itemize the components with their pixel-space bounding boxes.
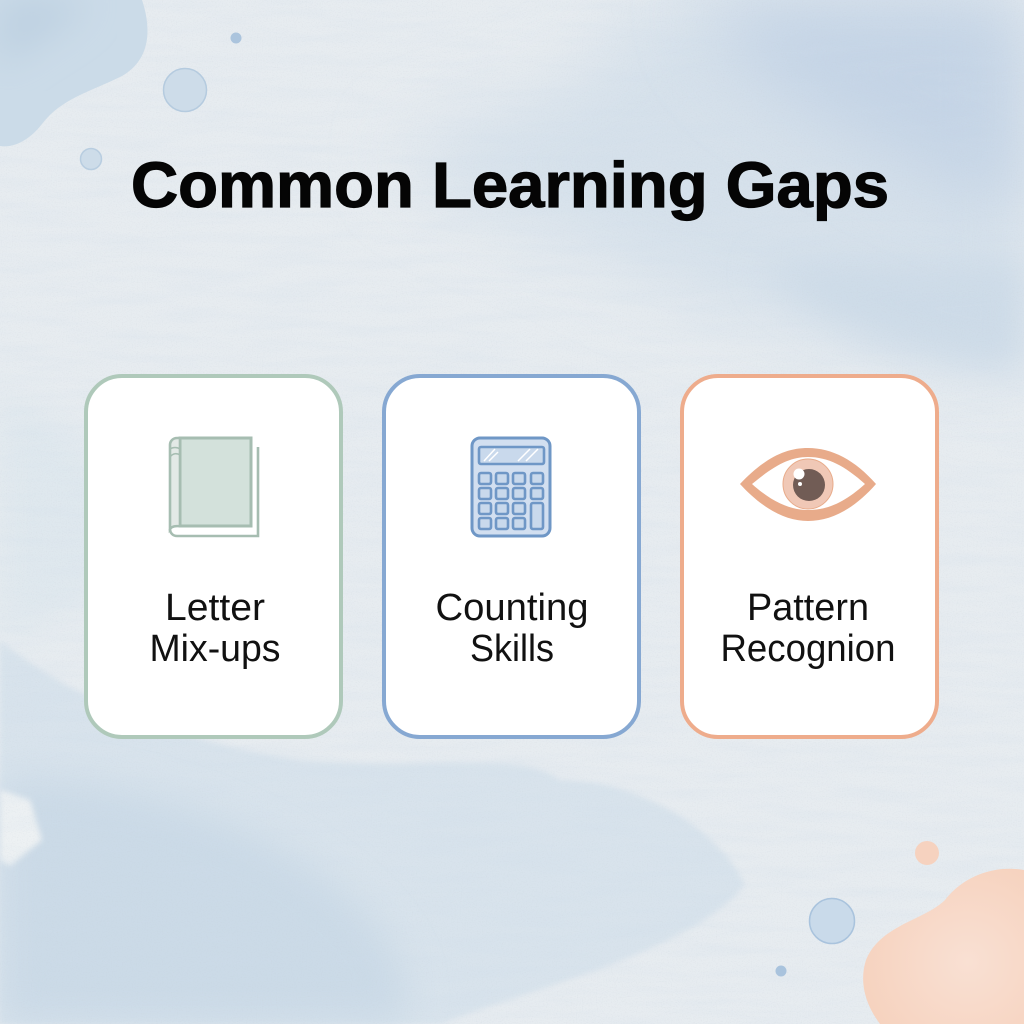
icon: calculator	[472, 438, 550, 536]
label: pattern recognition	[720, 587, 896, 670]
label: counting skills: Counting	[436, 587, 588, 629]
label: counting skills	[436, 587, 588, 670]
label: counting skills: Skills	[470, 628, 554, 670]
decoration: bottom-right blob and bubbles	[776, 841, 1024, 1024]
title: Common Learning Gaps	[131, 149, 889, 221]
decoration: top-left blob and bubbles	[0, 0, 242, 170]
label: pattern recognition: Recognion	[720, 628, 896, 670]
icon: book	[170, 438, 258, 536]
icon: eye	[740, 448, 876, 521]
label: letter mix-ups: Mix-ups	[150, 628, 280, 670]
panel: counting skills	[384, 376, 639, 737]
label: letter mix-ups: Letter	[165, 587, 265, 629]
panel: pattern recognition	[682, 376, 937, 737]
panel: letter mix-ups	[86, 376, 341, 737]
label: pattern recognition: Pattern	[747, 587, 869, 629]
label: letter mix-ups	[150, 587, 280, 670]
